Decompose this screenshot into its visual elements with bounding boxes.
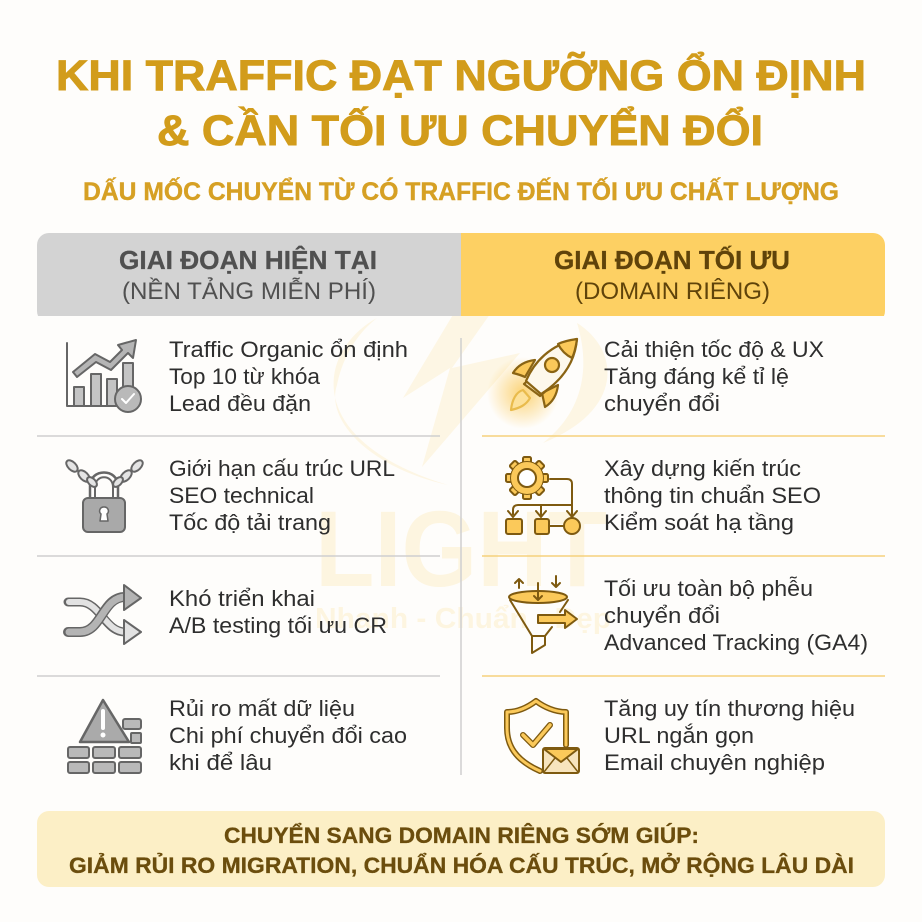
text: brand: URL ngắn gọn — [604, 723, 754, 748]
icon: padlock with chains — [64, 458, 145, 532]
text: traffic: Lead đều đặn — [169, 391, 311, 416]
text: traffic: Top 10 từ khóa — [169, 364, 320, 389]
icon: shield and envelope — [507, 701, 579, 773]
text: ab testing: A/B testing tối ưu CR — [169, 613, 387, 638]
watermark: LIGHT logo: LIGHT — [315, 488, 607, 609]
panel: left header: (NỀN TẢNG MIỄN PHÍ) — [122, 276, 376, 305]
text: limits: Tốc độ tải trang — [169, 510, 331, 535]
text: architecture: Kiểm soát hạ tầng — [604, 510, 794, 535]
text: brand: Tăng uy tín thương hiệu — [604, 696, 855, 721]
text: risk: Chi phí chuyển đổi cao — [169, 723, 407, 748]
icon: gear flow — [506, 457, 580, 534]
icon: warning firewall — [68, 700, 141, 773]
text: funnel — [604, 576, 868, 655]
panel: left header: GIAI ĐOẠN HIỆN TẠI — [119, 245, 377, 275]
text: risk — [169, 696, 407, 775]
text: architecture: thông tin chuẩn SEO — [604, 483, 821, 508]
text: limits: SEO technical — [169, 483, 314, 508]
text: speed: chuyển đổi — [604, 391, 720, 416]
icon: funnel — [509, 576, 577, 653]
title — [56, 50, 866, 155]
text: funnel: chuyển đổi — [604, 603, 720, 628]
text: architecture: Xây dựng kiến trúc — [604, 456, 801, 481]
callout: footer: CHUYỂN SANG DOMAIN RIÊNG SỚM GIÚP: — [224, 823, 699, 848]
text: funnel: Tối ưu toàn bộ phễu — [604, 576, 813, 601]
text: ab testing — [169, 586, 387, 638]
panel: left header — [37, 233, 461, 316]
text: speed: Tăng đáng kể tỉ lệ — [604, 364, 789, 389]
text: brand — [604, 696, 855, 775]
icon: rocket — [487, 339, 577, 429]
text: brand: Email chuyên nghiệp — [604, 750, 825, 775]
text: traffic: Traffic Organic ổn định — [169, 337, 408, 362]
panel: right header — [461, 233, 885, 316]
watermark: LIGHT logo — [315, 300, 611, 635]
text: funnel: Advanced Tracking (GA4) — [604, 630, 868, 655]
watermark: LIGHT logo: Nhanh - Chuẩn - Đẹp — [315, 603, 611, 635]
text: traffic — [169, 337, 408, 416]
text: limits: Giới hạn cấu trúc URL — [169, 456, 395, 481]
callout: footer — [37, 811, 885, 887]
title: KHI TRAFFIC ĐẠT NGƯỠNG ỔN ĐỊNH — [56, 50, 866, 100]
text: risk: Rủi ro mất dữ liệu — [169, 696, 355, 721]
icon: growth chart — [67, 340, 141, 412]
panel: right header: (DOMAIN RIÊNG) — [575, 278, 770, 305]
title: & CẦN TỐI ƯU CHUYỂN ĐỔI — [157, 105, 763, 155]
icon: shuffle arrows — [68, 585, 141, 644]
text: speed — [604, 337, 824, 416]
text: speed: Cải thiện tốc độ & UX — [604, 337, 824, 362]
callout: footer: GIẢM RỦI RO MIGRATION, CHUẨN HÓA CẤU TRÚC, MỞ RỘNG LÂU DÀI — [69, 853, 854, 878]
panel: right header: GIAI ĐOẠN TỐI ƯU — [554, 245, 790, 275]
text: architecture — [604, 456, 821, 535]
text: risk: khi để lâu — [169, 750, 272, 775]
text: ab testing: Khó triển khai — [169, 586, 315, 611]
text: limits — [169, 456, 395, 535]
subtitle: DẤU MỐC CHUYỂN TỪ CÓ TRAFFIC ĐẾN TỐI ƯU CHẤT LƯỢNG — [83, 176, 839, 206]
